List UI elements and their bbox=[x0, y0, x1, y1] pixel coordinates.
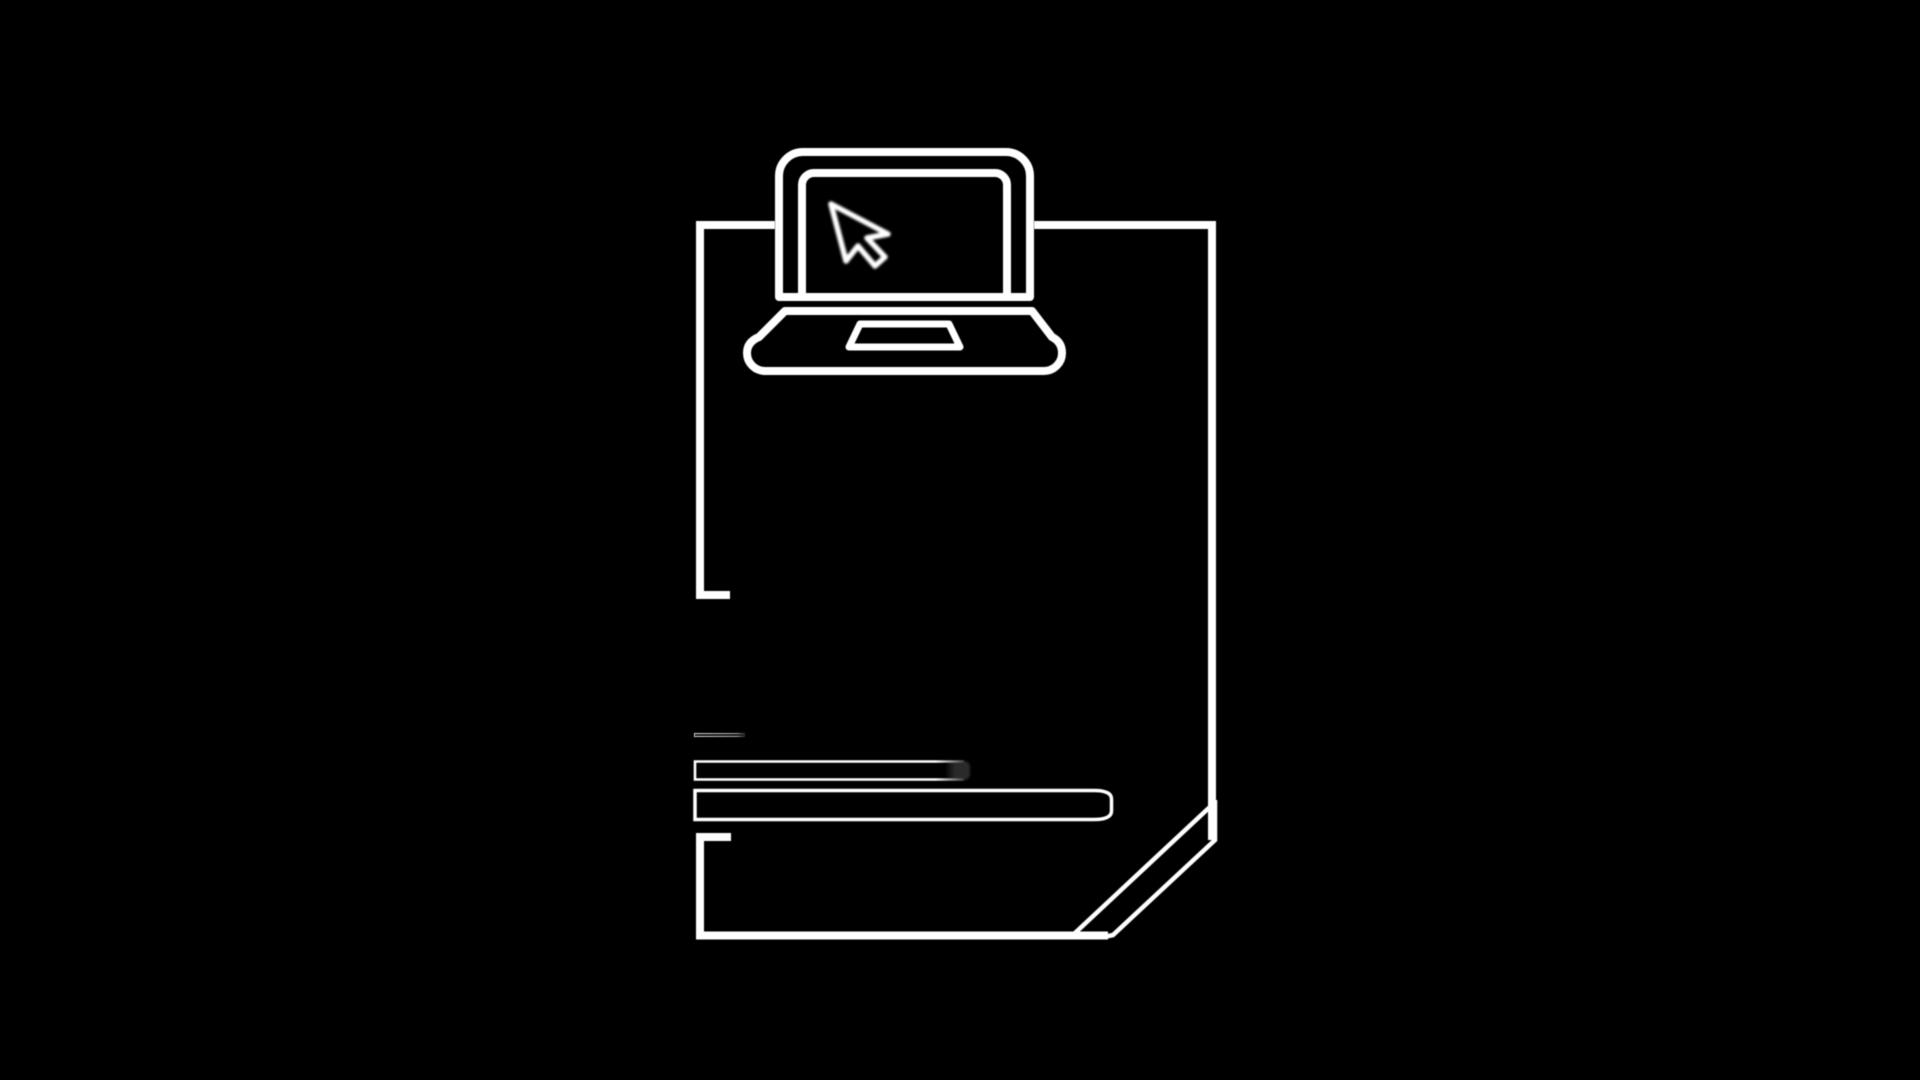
laptop screen bbox=[802, 173, 1007, 297]
icon: mouse cursor bbox=[831, 204, 888, 266]
placeholder bar: long bbox=[695, 790, 1112, 820]
document lower left bracket and bottom edge bbox=[700, 837, 1108, 936]
folded corner bbox=[1075, 800, 1215, 937]
laptop icon bbox=[747, 152, 1062, 371]
placeholder bar: short fading bbox=[694, 734, 744, 736]
laptop base bbox=[747, 311, 1062, 371]
trackpad bbox=[849, 324, 960, 347]
laptop lid bbox=[779, 152, 1030, 297]
document top right edge and right side bbox=[1034, 225, 1212, 840]
placeholder bar: medium fading bbox=[695, 761, 970, 780]
document top and left edge with upper bracket bbox=[700, 225, 775, 595]
document outline bbox=[700, 225, 1215, 937]
